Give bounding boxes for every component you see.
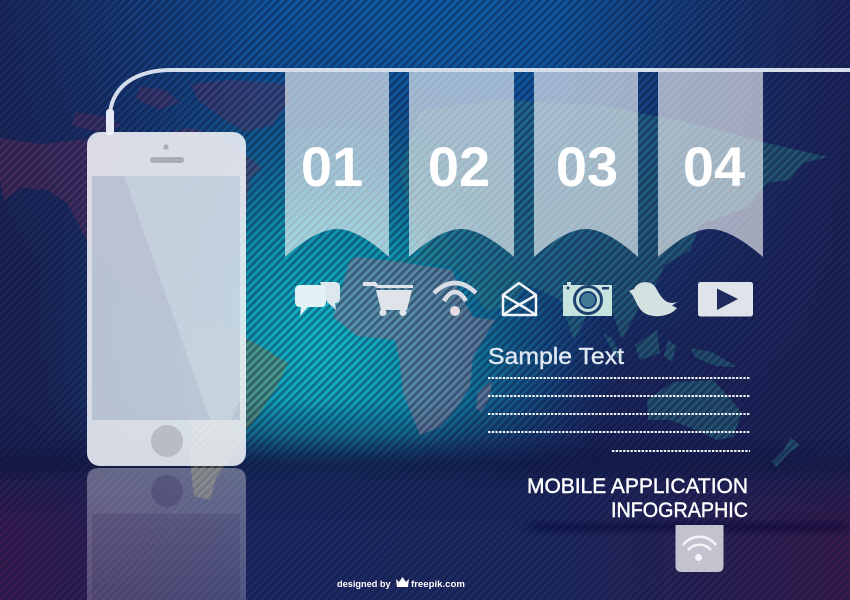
- title shadow strip: [530, 522, 850, 532]
- wifi tile: [676, 525, 724, 572]
- main title: INFOGRAPHIC: [611, 498, 748, 522]
- icon: crown: [396, 577, 409, 587]
- banner 03: [534, 72, 638, 257]
- home button: [151, 425, 183, 457]
- banner 01: 01: [301, 135, 363, 198]
- icon: envelope: [503, 283, 536, 315]
- world map: [0, 80, 828, 500]
- tile wifi glyph: [683, 537, 716, 561]
- main title: MOBILE APPLICATION: [527, 474, 748, 498]
- phone screen: [92, 176, 240, 420]
- phone reflection: [87, 468, 246, 600]
- screen glare: [124, 176, 240, 420]
- ribbon banners: [285, 72, 763, 257]
- icon: shopping cart: [363, 282, 413, 316]
- map: Madagascar: [476, 380, 492, 412]
- icon: wifi: [434, 283, 476, 316]
- map: Africa: [333, 257, 495, 435]
- footer credit: [337, 577, 465, 590]
- footer credit: designed by: [337, 579, 391, 589]
- map: Eurasia: [345, 100, 828, 340]
- phone: [87, 132, 246, 466]
- main title: [527, 474, 748, 522]
- icon: speech bubbles: [295, 282, 340, 316]
- banner 04: 04: [683, 135, 745, 198]
- map: Indonesia and New Guinea: [603, 330, 737, 367]
- map: New Zealand: [772, 437, 800, 467]
- speaker: [150, 157, 184, 163]
- banner 02: 02: [428, 135, 490, 198]
- map: North America: [0, 128, 262, 318]
- icon: camera: [563, 282, 612, 316]
- icon: bird: [629, 282, 677, 316]
- map: Australia: [647, 380, 742, 440]
- map: Greenland and Arctic islands: [72, 80, 290, 132]
- banner 02: [409, 72, 514, 257]
- map: South America: [178, 320, 288, 500]
- banner 03: 03: [556, 135, 618, 198]
- banner 04: [658, 72, 763, 257]
- footer credit: freepik.com: [411, 579, 465, 590]
- camera: [163, 144, 169, 150]
- cable connector: [106, 109, 114, 135]
- banner 01: [285, 72, 389, 257]
- icon: video play: [698, 282, 753, 316]
- charging cable: [106, 70, 850, 135]
- dotted text lines: [488, 378, 750, 451]
- sample text heading: Sample Text: [488, 343, 625, 369]
